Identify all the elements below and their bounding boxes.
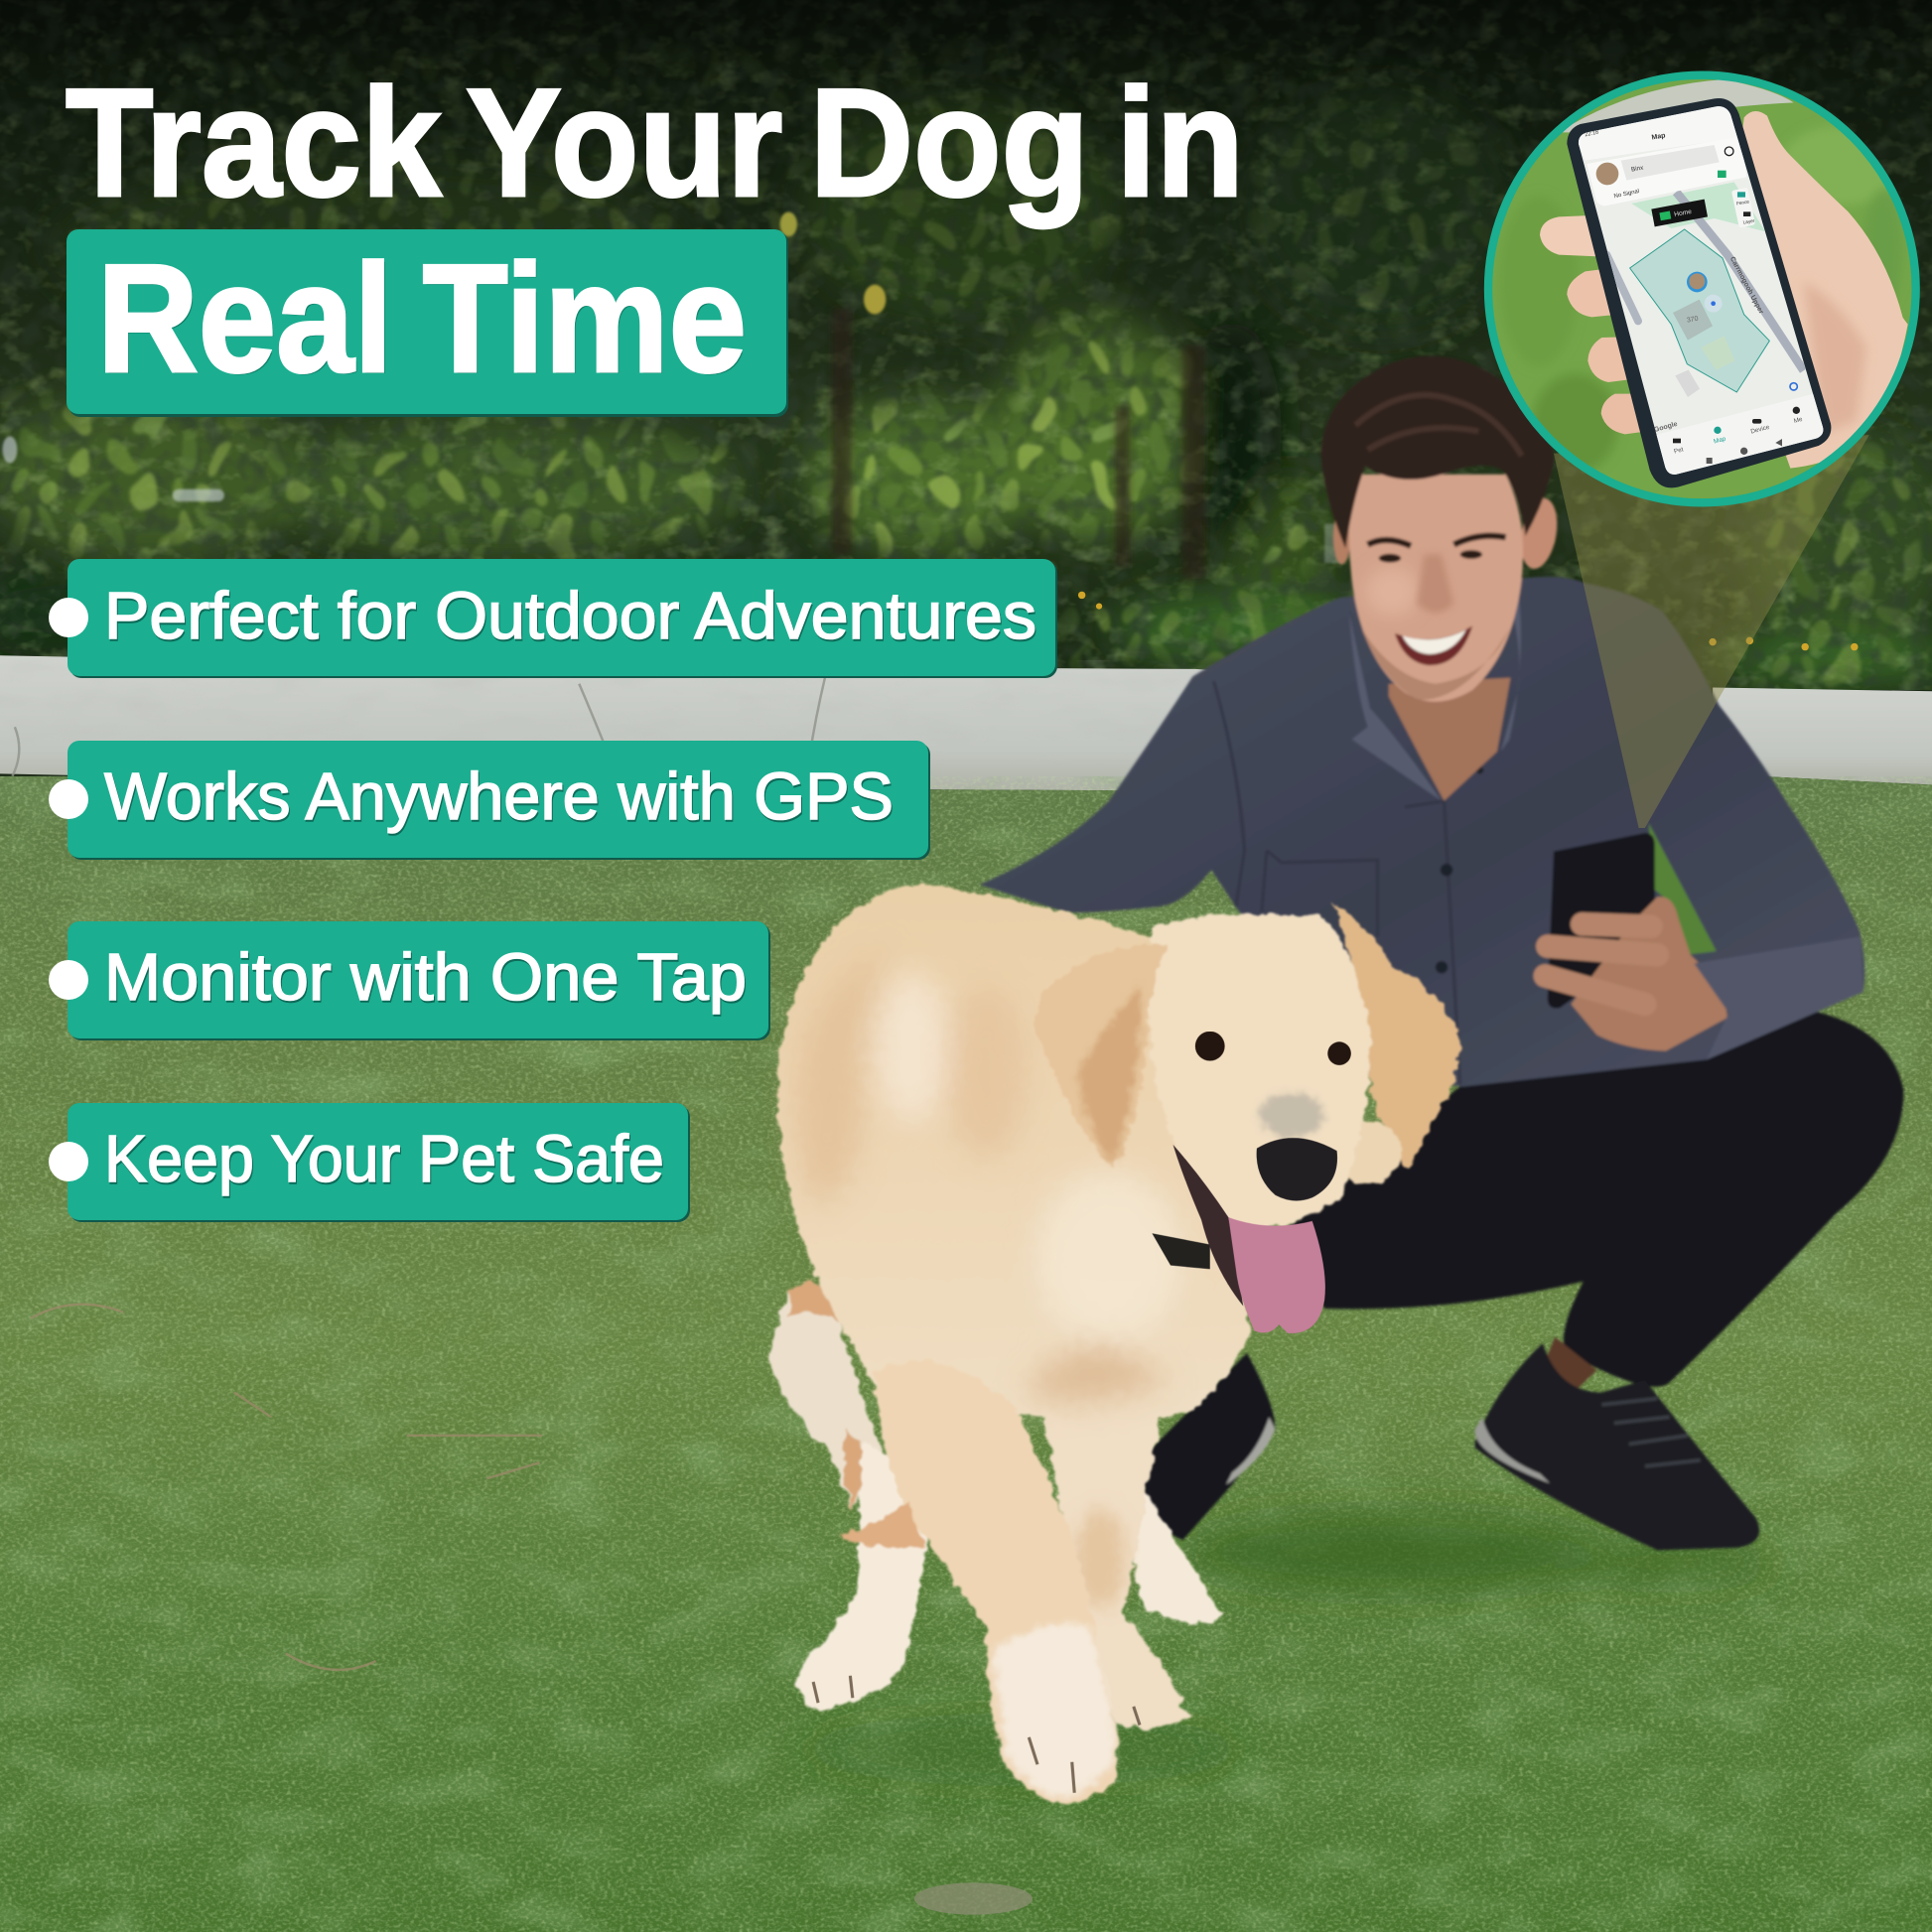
fence and layer buttons <box>1731 188 1755 228</box>
body shading <box>797 949 1182 1402</box>
feature 3 <box>49 921 770 1040</box>
road <box>1676 192 1804 370</box>
pet tab icon <box>1673 439 1681 443</box>
hind leg <box>797 1442 930 1709</box>
map tab icon <box>1714 427 1722 434</box>
highlight text: Real Time <box>97 232 747 404</box>
geofence <box>1630 229 1769 392</box>
label: Monitor with One Tap <box>104 940 747 1015</box>
map green area <box>1631 182 1765 231</box>
flower dots <box>1078 592 1859 650</box>
foliage backdrop <box>0 0 1932 690</box>
phone labels: Carrmogooh Upper <box>1728 256 1764 316</box>
grass gap between arm and body <box>1649 823 1717 955</box>
label: Keep Your Pet Safe <box>104 1122 664 1196</box>
eyes <box>1379 550 1482 563</box>
top bar <box>1572 96 1740 161</box>
shirt <box>980 577 1864 1087</box>
body <box>778 885 1249 1423</box>
hair <box>1320 356 1554 548</box>
feature 4 <box>49 1103 690 1222</box>
blurred lawn patches <box>1499 126 1903 474</box>
held phone <box>1548 833 1655 1009</box>
tan tuft <box>839 1501 924 1549</box>
fur under right ear <box>1333 1121 1402 1182</box>
second leg tan <box>1075 1509 1125 1608</box>
ear shading <box>1078 986 1141 1165</box>
phone labels: Google <box>1653 421 1679 434</box>
face <box>1349 475 1523 702</box>
bright leaf masses <box>0 86 1932 686</box>
pill shadow <box>69 561 1057 678</box>
pet photo <box>1689 273 1705 289</box>
pill <box>68 559 1055 676</box>
mouth <box>1173 1145 1243 1307</box>
bullet <box>49 779 88 819</box>
side road <box>1606 255 1638 321</box>
small leaf texture <box>0 0 1932 690</box>
phone labels: Me <box>1793 416 1804 425</box>
neighbouring footprint <box>1675 370 1700 397</box>
hand <box>1545 897 1727 1051</box>
phone body <box>1567 98 1831 487</box>
main front leg <box>874 1361 1118 1804</box>
label: Perfect for Outdoor Adventures <box>104 579 1036 653</box>
pet marker <box>1687 272 1708 292</box>
yard footprint <box>1701 336 1734 370</box>
dry twigs and stone <box>31 1305 542 1670</box>
shirt folds <box>1213 681 1460 1084</box>
mouth <box>1395 625 1472 665</box>
neck <box>1389 678 1511 801</box>
name field <box>1621 145 1720 181</box>
back of hand <box>1725 111 1908 469</box>
pill <box>68 1103 688 1220</box>
shoe sole <box>1474 1417 1550 1483</box>
ground shadows <box>801 1513 1774 1787</box>
paw highlight <box>992 1623 1115 1799</box>
highlight text shadow: Real Time <box>99 234 749 406</box>
concrete wall <box>0 655 1932 791</box>
home badge <box>1651 200 1708 226</box>
tongue <box>1228 1217 1325 1333</box>
dog face details <box>813 1032 1351 1793</box>
fingers <box>1545 924 1657 1004</box>
status icons <box>1718 171 1726 178</box>
phone labels <box>1585 129 1804 456</box>
teeth <box>1402 629 1466 654</box>
highlight shadow <box>69 231 788 417</box>
eyebrows <box>1368 536 1506 546</box>
pill <box>68 921 768 1038</box>
feature 2 <box>49 741 930 860</box>
phone labels: Binx <box>1630 164 1645 174</box>
tree trunks <box>832 308 1205 579</box>
man <box>980 356 1903 1550</box>
golden retriever <box>768 885 1461 1804</box>
palm shade <box>1804 281 1866 434</box>
phone labels: Map <box>1713 436 1727 446</box>
collar <box>1349 579 1521 801</box>
title highlight: Real Time <box>67 229 788 417</box>
callout beam <box>1554 435 1869 828</box>
nose <box>1257 1138 1337 1201</box>
pill shadow <box>69 1105 690 1222</box>
lawn <box>0 773 1932 1932</box>
callout ring <box>1488 75 1916 502</box>
nose <box>1417 554 1453 613</box>
muzzle grey <box>1259 1093 1323 1138</box>
phone labels: Home <box>1674 208 1693 218</box>
phone labels: Device <box>1750 424 1771 436</box>
pill shadow <box>69 923 770 1040</box>
shirt buttons <box>1436 766 1483 973</box>
dark canopy shade at the top <box>0 0 1932 415</box>
phone labels: 22:18 <box>1585 129 1599 138</box>
hair highlight <box>1355 395 1522 456</box>
me tab icon <box>1793 407 1800 414</box>
pill shadow <box>69 743 930 860</box>
pill <box>68 741 928 858</box>
home fence icon <box>1659 210 1671 220</box>
layer icon <box>1743 211 1750 216</box>
accent leaves <box>780 211 886 314</box>
stubble shade <box>1361 628 1509 700</box>
right shoe <box>1475 1343 1759 1550</box>
left shoe sole <box>1226 1417 1276 1484</box>
toes <box>813 1676 1140 1793</box>
callout: phone in hand <box>1479 67 1926 513</box>
tail <box>768 1283 881 1512</box>
sky glints <box>2 436 1342 563</box>
ears <box>1516 495 1562 572</box>
phone labels: 370 <box>1686 316 1699 325</box>
phone labels: Layer <box>1742 218 1755 225</box>
location dot <box>1705 295 1723 313</box>
tab bar <box>1655 394 1827 480</box>
tail tan patches <box>790 1283 869 1512</box>
collar <box>1152 1233 1210 1269</box>
building footprint <box>1673 300 1713 341</box>
shoe laces <box>1601 1399 1701 1466</box>
sleeve cuff <box>1694 936 1863 1059</box>
info card <box>1587 136 1746 206</box>
location centre <box>1711 301 1716 306</box>
bullet <box>49 1142 88 1181</box>
second front leg <box>1035 1368 1189 1728</box>
trousers <box>1282 1011 1903 1387</box>
right ear <box>1333 904 1461 1171</box>
phone labels: Map <box>1651 132 1666 142</box>
device tab icon <box>1752 419 1761 424</box>
left ear <box>1036 945 1169 1169</box>
avatar <box>1596 163 1618 185</box>
fingers <box>1540 215 1598 256</box>
phone screen <box>1559 92 1840 489</box>
left shoe <box>1144 1353 1276 1540</box>
fence icon <box>1737 192 1745 198</box>
title line: Track Your Dog in <box>66 57 1244 228</box>
back leg <box>1134 1478 1222 1624</box>
palm <box>1571 897 1727 1051</box>
phone labels: No Signal <box>1613 189 1640 200</box>
bullet <box>49 960 88 1000</box>
label: Works Anywhere with GPS <box>104 759 894 834</box>
eyes <box>1195 1032 1225 1061</box>
sock <box>1538 1337 1596 1399</box>
bullet <box>49 598 88 637</box>
feature 1 <box>49 559 1057 678</box>
head <box>1149 913 1371 1228</box>
highlight box <box>67 229 786 414</box>
settings icon <box>1725 147 1733 156</box>
callout interior <box>1479 67 1926 513</box>
nav buttons <box>1707 439 1782 464</box>
wall seen through lens <box>1559 79 1794 132</box>
phone labels: Fence <box>1736 199 1750 207</box>
locate button <box>1790 383 1797 390</box>
cheek highlight <box>1365 567 1420 617</box>
phone labels: Pet <box>1673 446 1685 456</box>
